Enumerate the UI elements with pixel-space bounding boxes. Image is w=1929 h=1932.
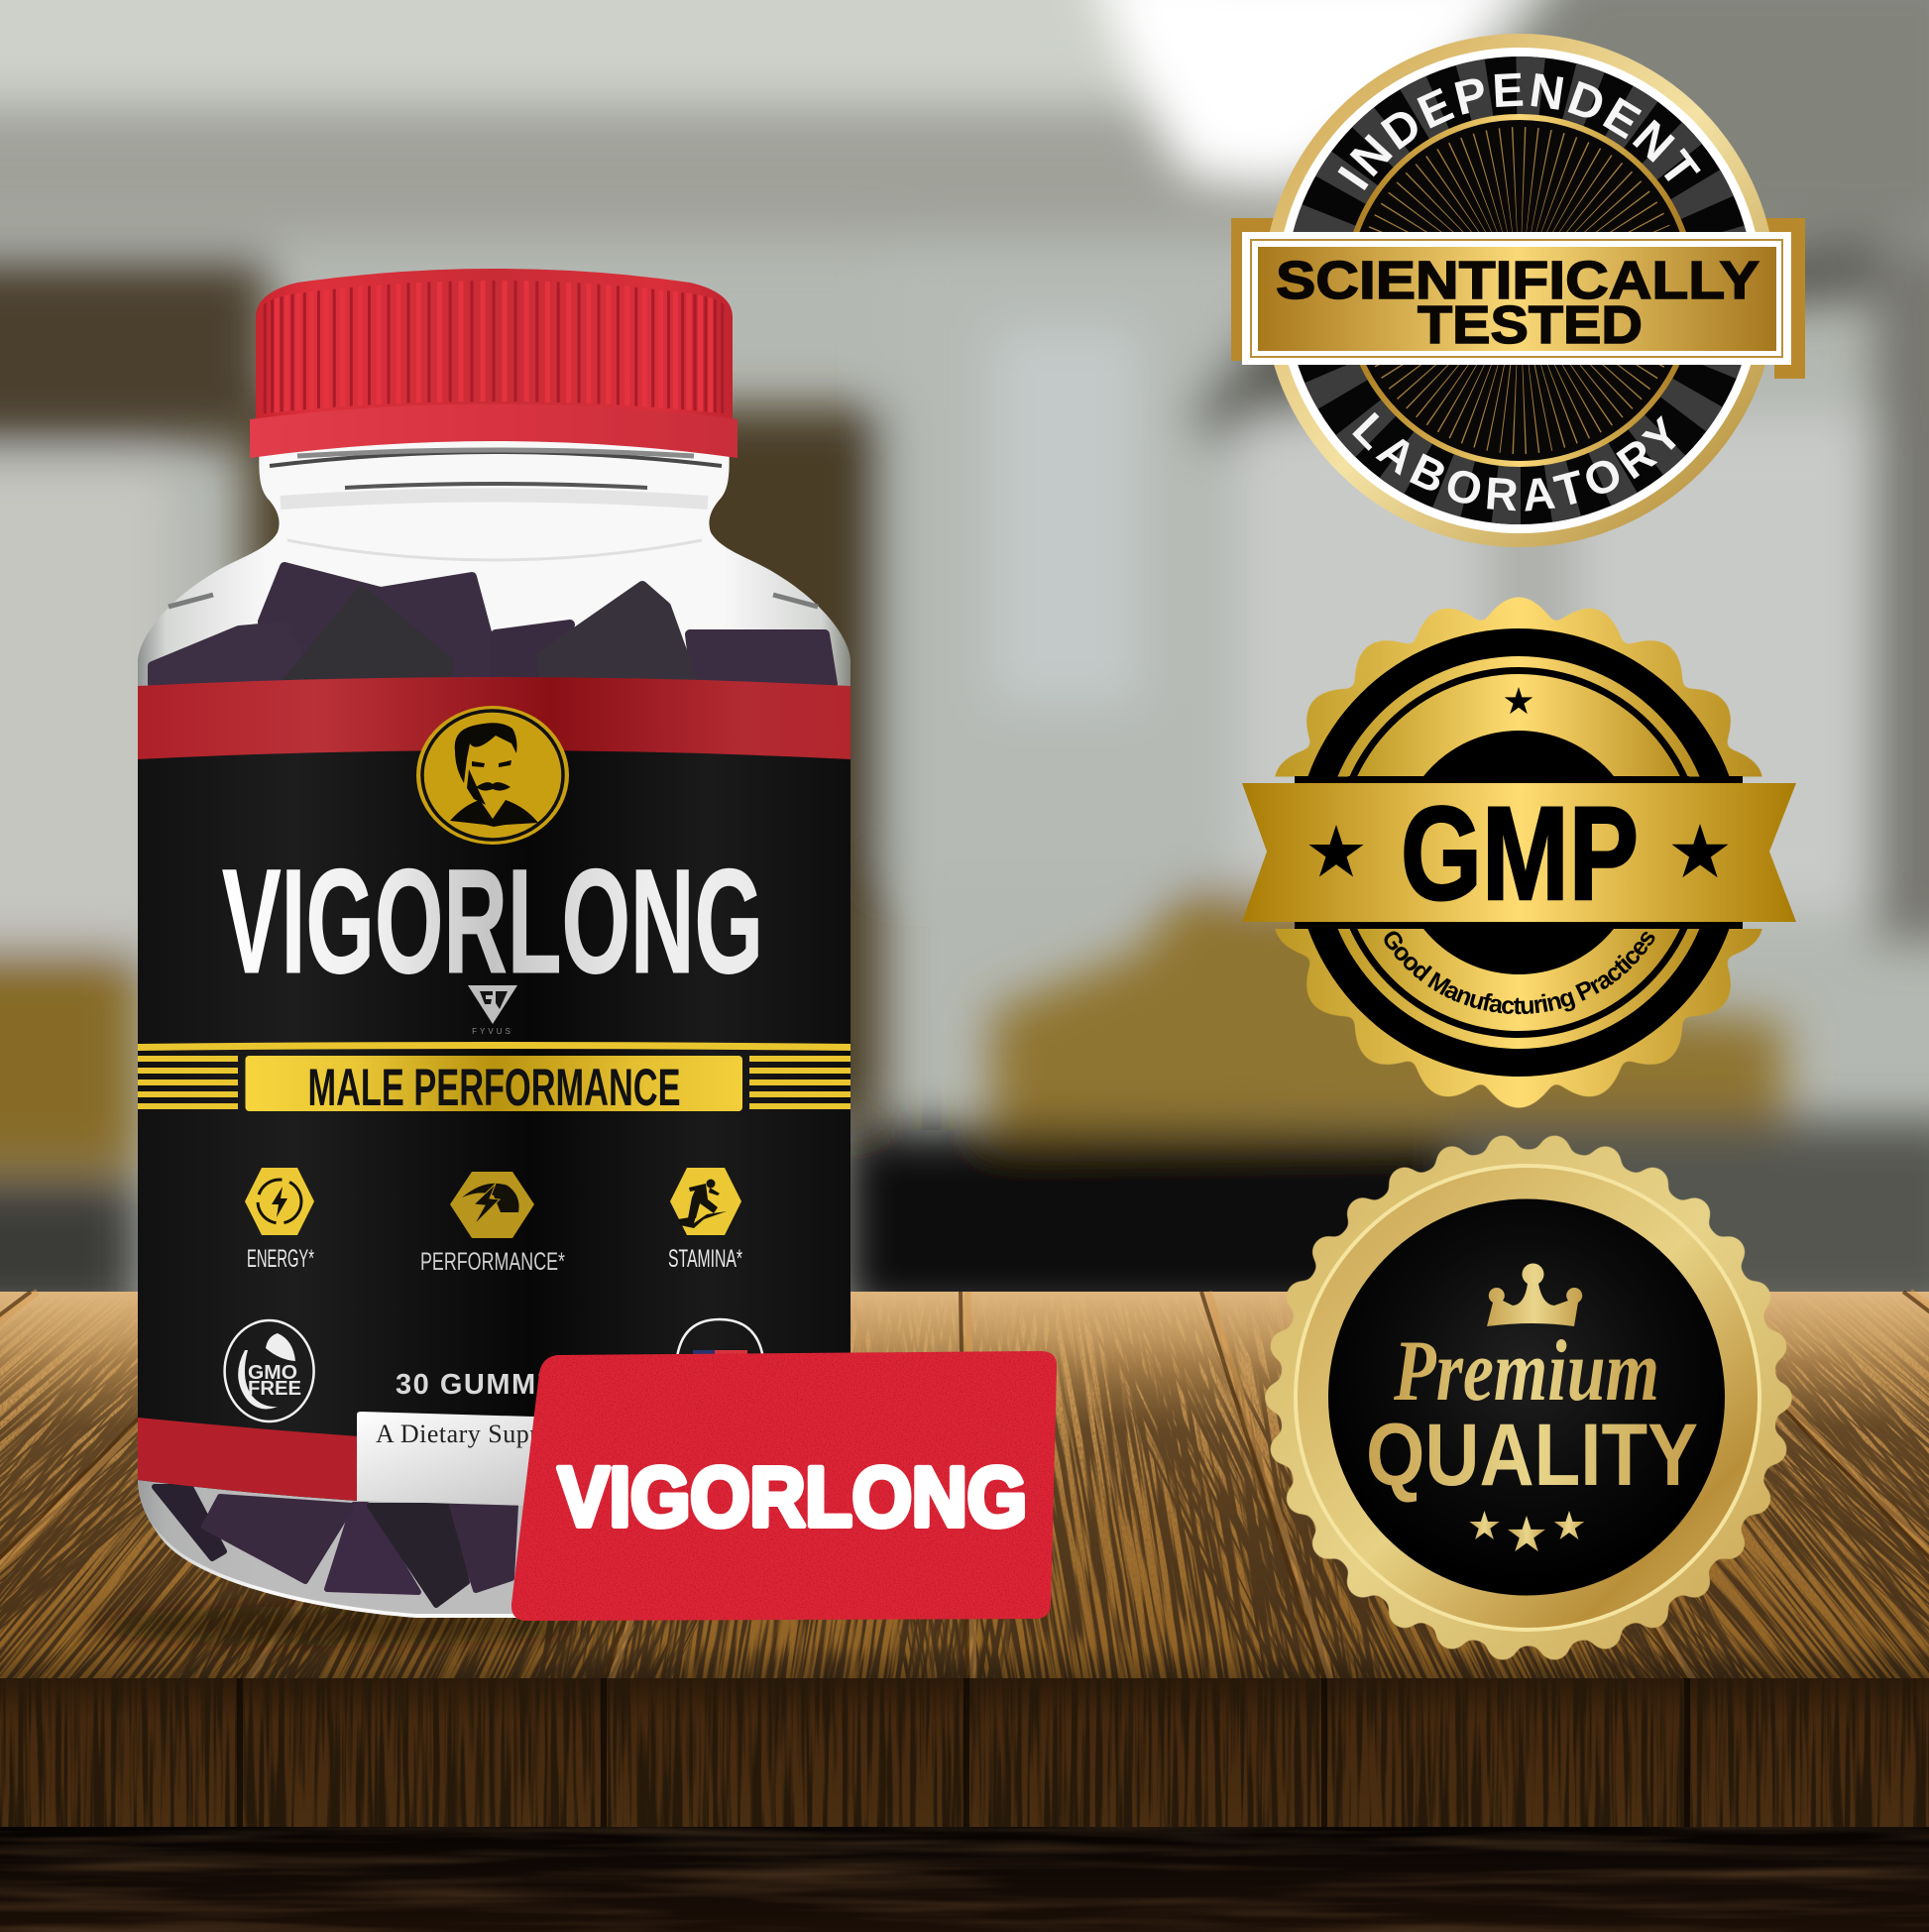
dietary supplement text: A Dietary Supplement (376, 1420, 617, 1448)
fyvus mark (468, 985, 517, 1036)
bottle cap (250, 268, 738, 458)
table front edge (0, 1678, 1929, 1827)
red band top (138, 677, 851, 763)
seal scalloped edge (1263, 597, 1774, 1108)
logo medallion (416, 706, 569, 845)
yellow stripes (138, 1042, 851, 1109)
gummies count: 30 GUMMIES (396, 1369, 588, 1401)
outer gold ring (1263, 34, 1776, 547)
good manufacturing practices arc text: Good Manufacturing Practices (1384, 932, 1655, 1015)
banner (1242, 232, 1791, 365)
card brand name: VIGORLONG (558, 1450, 1027, 1543)
gmp letters: GMP (1401, 780, 1639, 928)
top gummies (153, 567, 833, 684)
banner back (1231, 218, 1805, 379)
badge: GMP (1242, 597, 1796, 1108)
gmo free seal: GMO (248, 1362, 297, 1384)
bottle shadow (89, 1606, 585, 1646)
wooden table top (0, 1292, 1929, 1681)
man portrait (450, 723, 538, 827)
badge: premium quality (1281, 1150, 1776, 1646)
black label body (138, 750, 851, 1505)
benefit labels: STAMINA* (668, 1245, 742, 1273)
cap collar (250, 404, 738, 458)
table underside (0, 1827, 1929, 1932)
badge: scientifically tested (1231, 34, 1805, 547)
glass neck reflections (169, 450, 818, 607)
fyvus mark: FYVUS (472, 1027, 513, 1036)
banner text: SCIENTIFICALLY (1276, 251, 1759, 310)
benefit labels: ENERGY* (247, 1245, 314, 1273)
bottom gummies (155, 1487, 515, 1605)
black disc (1328, 1199, 1725, 1596)
inner gold ring (1346, 117, 1693, 464)
gmo free seal: FREE (248, 1378, 301, 1400)
benefit labels (247, 1245, 742, 1276)
crown (1487, 1263, 1582, 1326)
badge: scientifically tested: TESTED (1418, 295, 1643, 355)
made in usa seal (676, 1319, 764, 1368)
quality text: QUALITY (1366, 1405, 1698, 1504)
bottle (138, 268, 851, 1618)
black ring (1295, 628, 1743, 1077)
gmo free seal (225, 1320, 314, 1421)
red card (506, 1348, 1061, 1626)
icon: stamina (670, 1168, 741, 1235)
three stars (1469, 1511, 1584, 1551)
gmp ribbon (1242, 783, 1796, 922)
male performance box: MALE PERFORMANCE (307, 1059, 680, 1117)
sunburst rays (1409, 179, 1631, 401)
white panel (357, 1412, 634, 1509)
glass bottom tint (138, 1477, 714, 1614)
top star (1505, 687, 1532, 714)
brand name: VIGORLONG (222, 838, 763, 1004)
gold ring (1296, 1166, 1759, 1630)
blurred room background (0, 0, 1929, 1318)
premium script: Premium (1393, 1323, 1659, 1420)
label (138, 677, 851, 1509)
scalloped edge (1281, 1150, 1776, 1646)
icon: performance (450, 1172, 534, 1238)
glass jar (138, 441, 851, 1618)
cap body (256, 269, 733, 421)
icon: energy (245, 1168, 314, 1235)
male performance box (246, 1056, 742, 1117)
red band bottom (138, 1418, 359, 1501)
gold rings (1322, 656, 1715, 1049)
laboratory arc text: LABORATORY (1352, 412, 1676, 511)
ribbon stars (1308, 824, 1729, 877)
independent arc text: INDEPENDENT (1338, 73, 1701, 190)
benefit labels: PERFORMANCE* (420, 1248, 565, 1276)
